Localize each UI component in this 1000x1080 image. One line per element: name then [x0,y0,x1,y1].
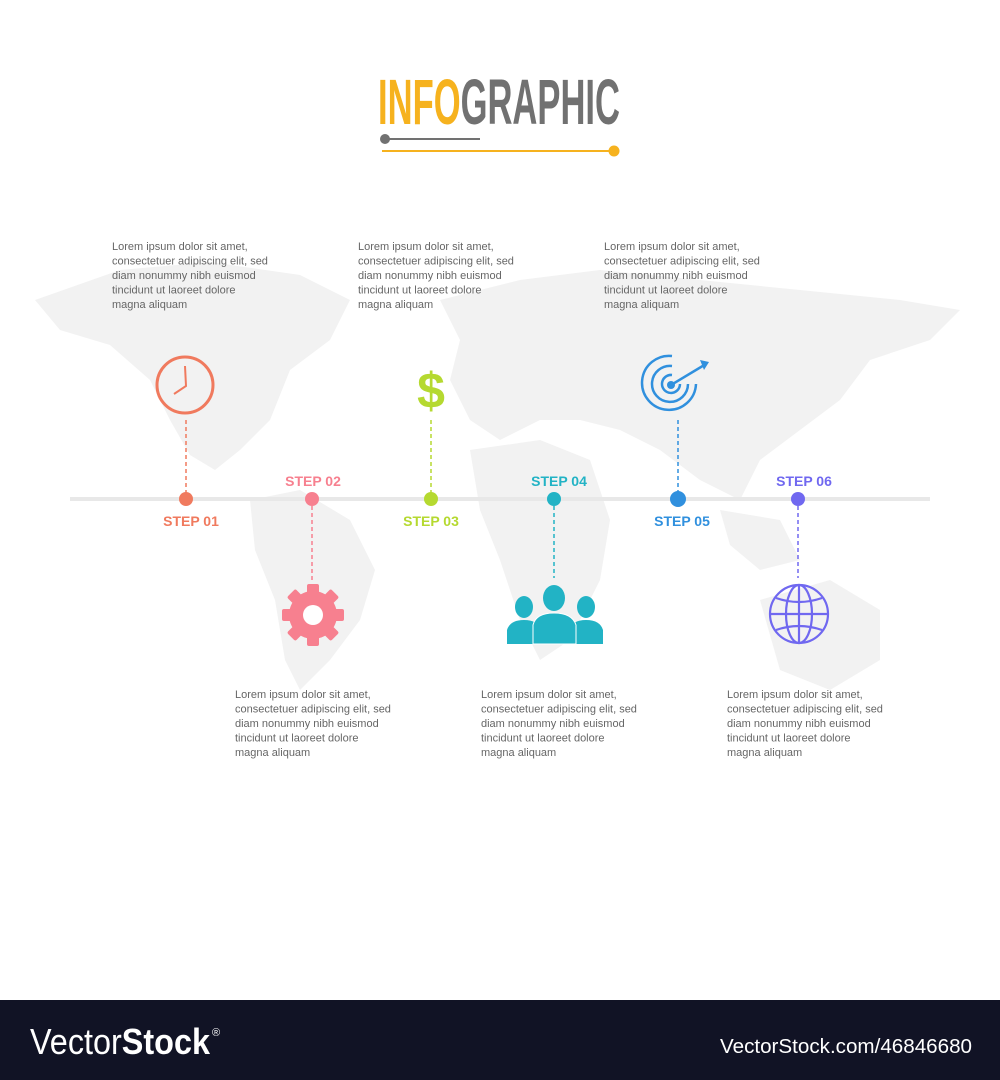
text block bottom 6: magna aliquam [727,747,802,759]
step 06: STEP 06 [776,473,832,489]
title: INFOGRAPHIC [378,66,620,138]
text block top 5 [604,241,760,311]
icon: target [642,356,709,410]
icon: dollar: $ [417,363,445,419]
text block top 5: consectetuer adipiscing elit, sed [604,256,760,268]
text block top 1: Lorem ipsum dolor sit amet, [112,241,248,253]
text block bottom 2: Lorem ipsum dolor sit amet, [235,689,371,701]
text block top 1: tincidunt ut laoreet dolore [112,284,236,296]
text block top 1: consectetuer adipiscing elit, sed [112,256,268,268]
text block bottom 2: consectetuer adipiscing elit, sed [235,704,391,716]
text block bottom 6: Lorem ipsum dolor sit amet, [727,689,863,701]
text block top 3: magna aliquam [358,299,433,311]
text block top 5: magna aliquam [604,299,679,311]
text block bottom 6: diam nonummy nibh euismod [727,718,871,730]
text block bottom 4: tincidunt ut laoreet dolore [481,732,605,744]
step 01 [157,357,219,529]
text block top 3: consectetuer adipiscing elit, sed [358,256,514,268]
step 01: STEP 01 [163,513,219,529]
footer: VectorStock [30,1021,211,1062]
text block top 5: diam nonummy nibh euismod [604,270,748,282]
footer: ® [212,1027,220,1039]
footer [0,1000,1000,1080]
text block bottom 4: magna aliquam [481,747,556,759]
text block bottom 6 [727,689,883,759]
icon: people [507,585,603,644]
step 03 [403,363,459,529]
title [378,66,620,156]
step 05: STEP 05 [654,513,710,529]
text block bottom 2: diam nonummy nibh euismod [235,718,379,730]
icon: globe [770,585,828,643]
text block top 3 [358,241,514,311]
step 04 [507,473,603,644]
text block bottom 2 [235,689,391,759]
step 03: STEP 03 [403,513,459,529]
text block top 5: Lorem ipsum dolor sit amet, [604,241,740,253]
text block bottom 4 [481,689,637,759]
text block top 3: tincidunt ut laoreet dolore [358,284,482,296]
footer: VectorStock.com/46846680 [720,1036,972,1058]
text block bottom 4: Lorem ipsum dolor sit amet, [481,689,617,701]
step 06 [770,473,832,643]
text block bottom 4: diam nonummy nibh euismod [481,718,625,730]
text block top 1: diam nonummy nibh euismod [112,270,256,282]
icon: clock [157,357,213,413]
world map background [35,262,960,690]
step 04: STEP 04 [531,473,587,489]
step 05 [642,356,710,529]
text block bottom 6: tincidunt ut laoreet dolore [727,732,851,744]
text block top 3: diam nonummy nibh euismod [358,270,502,282]
text block top 1 [112,241,268,311]
text block top 3: Lorem ipsum dolor sit amet, [358,241,494,253]
text block top 5: tincidunt ut laoreet dolore [604,284,728,296]
text block bottom 4: consectetuer adipiscing elit, sed [481,704,637,716]
step 02: STEP 02 [285,473,341,489]
icon: gear [282,584,344,646]
text block bottom 6: consectetuer adipiscing elit, sed [727,704,883,716]
text block bottom 2: magna aliquam [235,747,310,759]
text block top 1: magna aliquam [112,299,187,311]
text block bottom 2: tincidunt ut laoreet dolore [235,732,359,744]
step 02 [282,473,344,646]
timeline line [70,497,930,501]
